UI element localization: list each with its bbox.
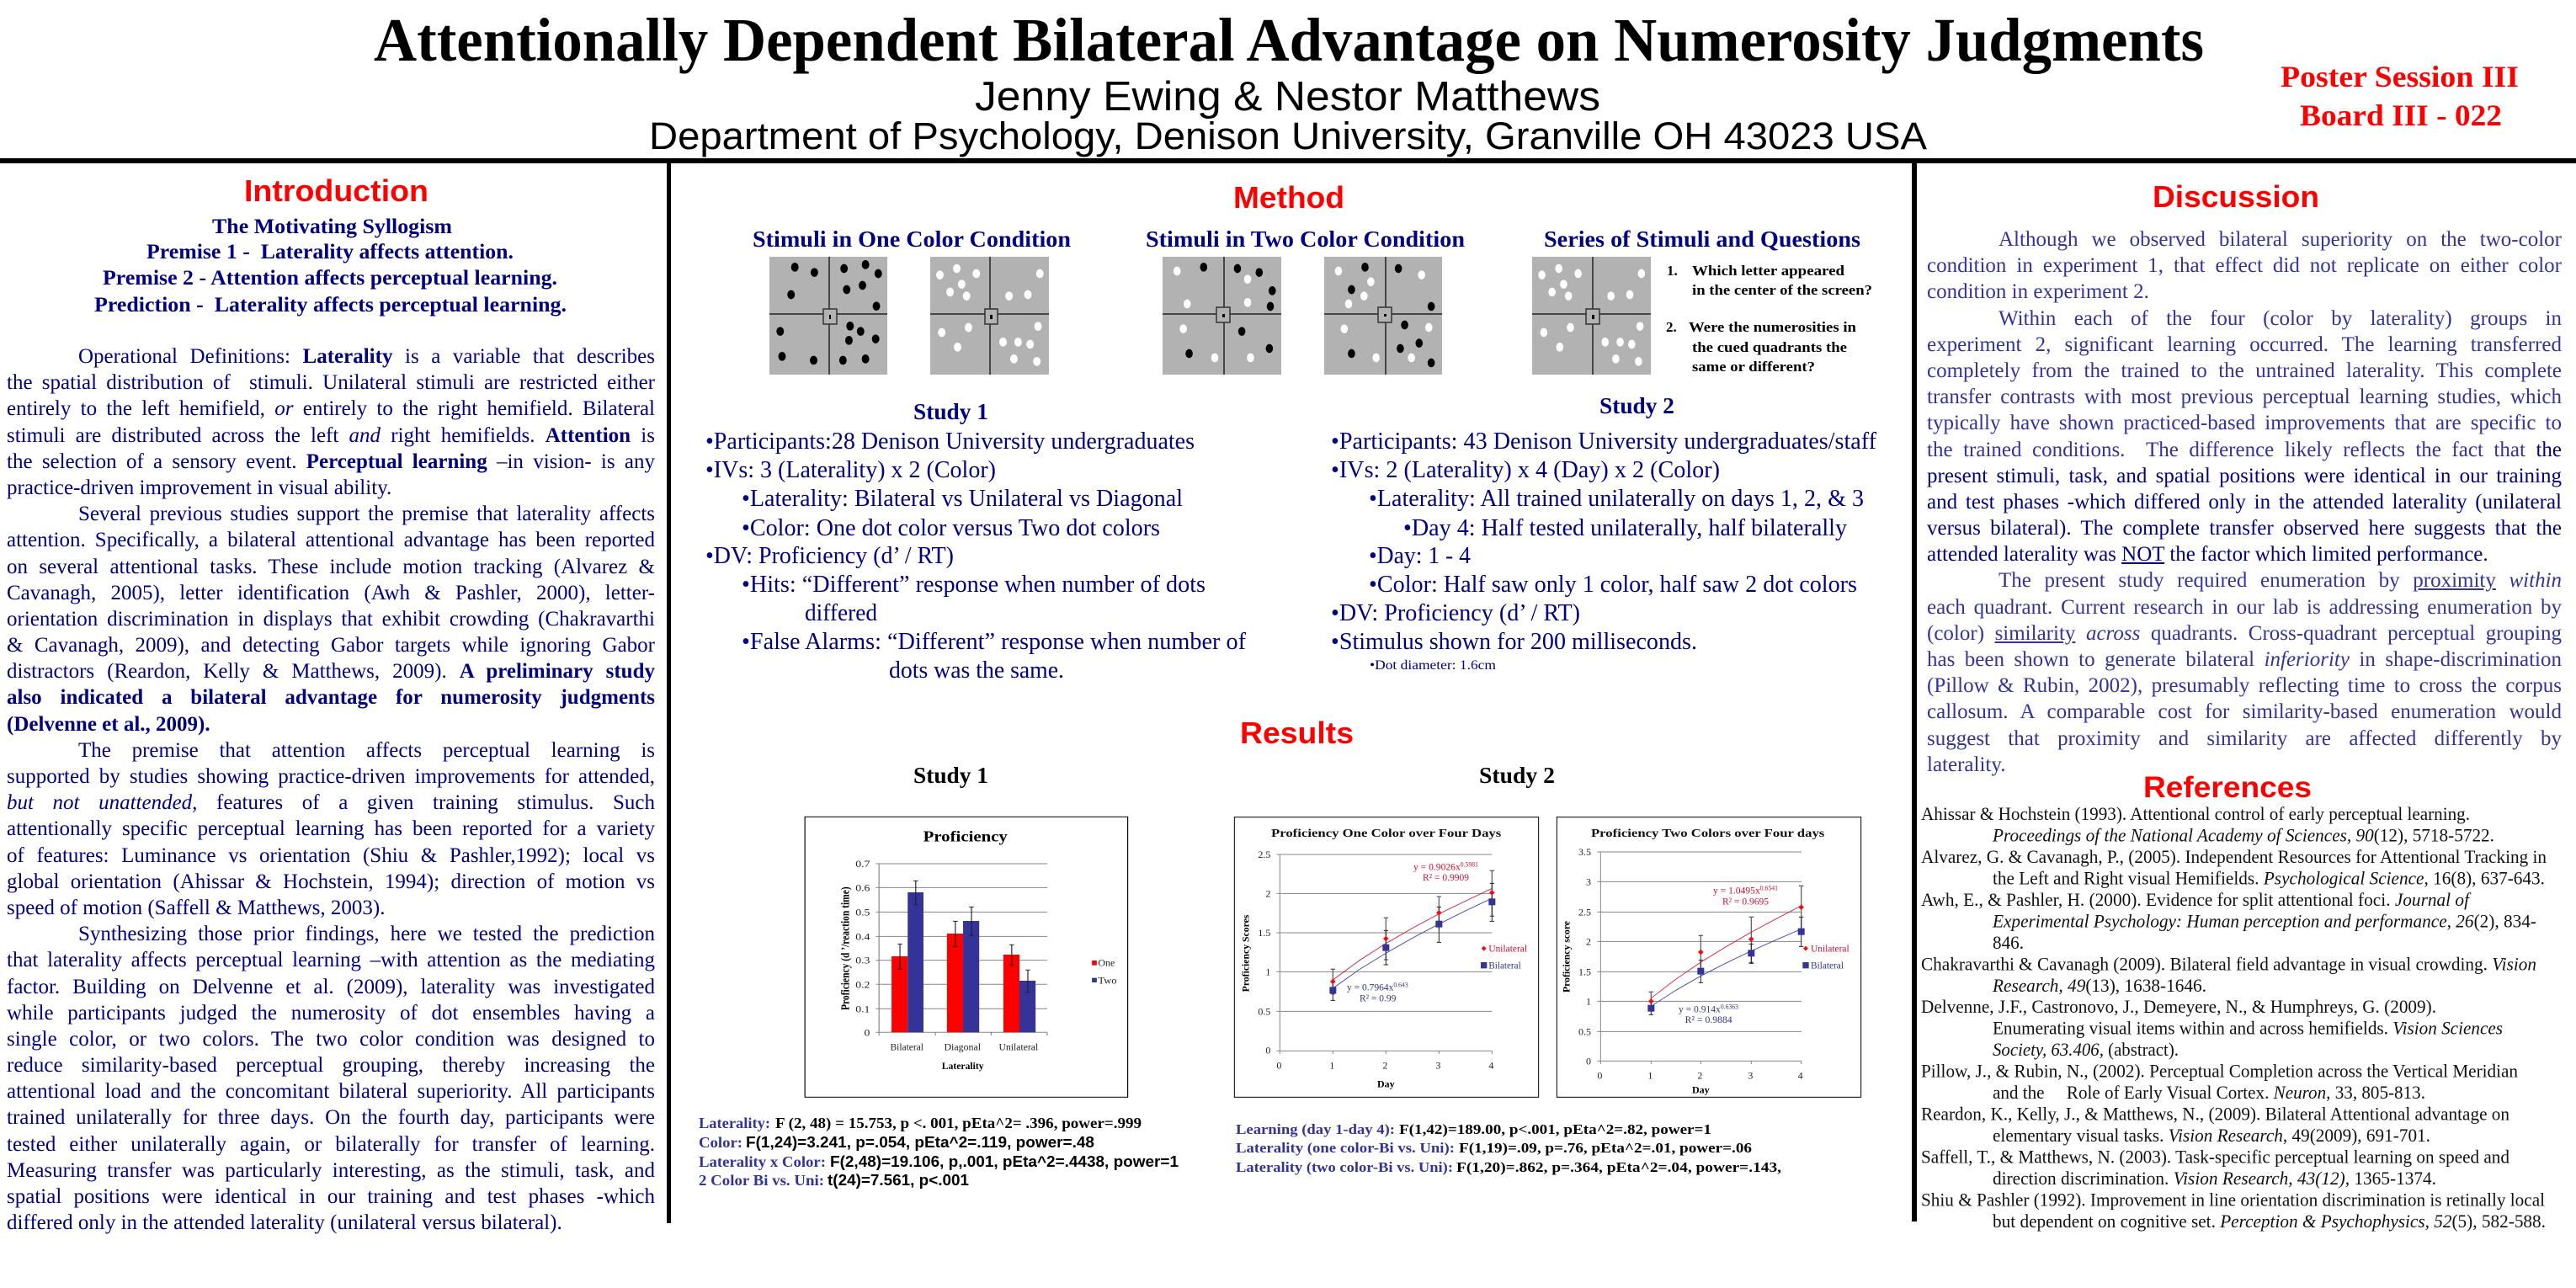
study 2 statistics: F(1,19)=.09, p=.76, pEta^2=.01, power=.06 xyxy=(1459,1140,1752,1156)
results study labels: Study 2 xyxy=(1479,763,1555,788)
paragraph: operational definitions: the selection of a sensory event. Perceptual learning –in vision- is any xyxy=(7,450,655,473)
paragraph: operational definitions: Operational Definitions: Laterality is a variable that describes xyxy=(78,345,655,368)
paragraph: attention and learning: speed of motion (Saffell & Matthews, 2003). xyxy=(7,897,385,919)
study 1 method list: •Hits: “Different” response when number of dots xyxy=(742,572,1206,598)
study 2 statistics: Learning (day 1-day 4): xyxy=(1236,1121,1395,1137)
study 1 statistics: Laterality: xyxy=(699,1115,770,1131)
bar chart: proficiency by laterality and color: 0.7 xyxy=(855,858,870,870)
paragraph: proximity and similarity: The present study required enumeration by proximity within xyxy=(1999,569,2562,592)
line chart: proficiency two colors over four days: 1 xyxy=(1586,995,1591,1007)
panel: method xyxy=(705,180,1877,684)
paragraph: operational definitions: the spatial distribution of stimuli. Unilateral stimuli are restricted either xyxy=(7,371,655,394)
line chart: proficiency one color over four days xyxy=(1234,817,1539,1097)
line chart: proficiency two colors over four days: 4 xyxy=(1798,1070,1803,1082)
study 1 method list: dots was the same. xyxy=(889,657,1064,684)
line chart: proficiency one color over four days: 1 xyxy=(1329,1059,1334,1071)
introduction body text xyxy=(7,345,655,1234)
study 1 method list: •False Alarms: “Different” response when number of xyxy=(742,629,1247,655)
line chart: proficiency one color over four days: 2 xyxy=(1382,1059,1387,1071)
study 2 statistics: Laterality (two color-Bi vs. Uni): xyxy=(1236,1159,1453,1175)
reference list: Ahissar & Hochstein (1993). Attentional control of early perceptual learning. xyxy=(1921,803,2470,824)
line chart: proficiency two colors over four days: 3.5 xyxy=(1578,846,1591,858)
reference list: Society, 63.406, (abstract). xyxy=(1993,1039,2179,1060)
subheadings: stimuli conditions: Stimuli in Two Color Condition xyxy=(1146,226,1465,252)
bar chart: proficiency by laterality and color: 0 xyxy=(865,1026,870,1038)
paragraph: experiment replication: condition in experiment 1, that effect did not replicate on either color xyxy=(1927,254,2562,277)
questions list: Which letter appeared xyxy=(1692,263,1845,279)
paragraph: experiment replication: condition in experiment 2. xyxy=(1927,280,2149,303)
results study labels xyxy=(913,763,1555,788)
study 1 method list: •IVs: 3 (Laterality) x 2 (Color) xyxy=(705,457,996,483)
bar chart: proficiency by laterality and color: 0.4 xyxy=(855,930,870,942)
panel: introduction xyxy=(7,173,655,1234)
bar chart: proficiency by laterality and color: 0.2 xyxy=(855,978,870,990)
paragraph: attention and learning: global orientation (Ahissar & Hochstein, 1994); direction of motion vs xyxy=(7,870,655,893)
motivating syllogism: Premise 2 - Attention affects perceptual learning. xyxy=(103,267,557,290)
paragraph: previous studies: Several previous studies support the premise that laterality affects xyxy=(78,503,655,525)
line chart: proficiency one color over four days: 0.5 xyxy=(1258,1005,1270,1017)
paragraph: previous studies: (Delvenne et al., 2009). xyxy=(7,713,210,736)
line chart: proficiency one color over four days: 0 xyxy=(1265,1045,1270,1056)
study 1 method list: •Color: One dot color versus Two dot colors xyxy=(742,515,1160,541)
reference list: and the Role of Early Visual Cortex. Neuron, 33, 805-813. xyxy=(1993,1082,2425,1103)
authors: Jenny Ewing & Nestor Matthews xyxy=(975,74,1600,120)
study 2 method heading: Study 2 xyxy=(1599,393,1674,418)
bar chart: proficiency by laterality and color xyxy=(805,817,1128,1097)
paragraph: synthesis and prediction: that laterality affects perceptual learning –with attention as the mediating xyxy=(7,949,655,971)
study 2 method list: •Day 4: Half tested unilaterally, half bilaterally xyxy=(1403,515,1847,541)
paragraph: synthesis and prediction: trained unilaterally for three days. On the fourth day, participants were xyxy=(7,1106,655,1129)
line chart: proficiency two colors over four days: 0 xyxy=(1597,1070,1602,1082)
line chart: proficiency one color over four days: Unilateral xyxy=(1488,942,1528,954)
reference list: Experimental Psychology: Human perception and performance, 26(2), 834- xyxy=(1992,910,2536,931)
stimulus: one color black dots xyxy=(769,257,887,375)
reference list: but dependent on cognitive set. Perception & Psychophysics, 52(5), 582-588. xyxy=(1993,1211,2546,1232)
paragraph: attention and learning: of features: Luminance vs orientation (Shiu & Pashler,1992); local vs xyxy=(7,844,655,867)
line chart: proficiency two colors over four days: Proficiency score xyxy=(1560,920,1572,993)
poster session label: Board III - 022 xyxy=(2300,98,2502,132)
paragraph: operational definitions: practice-driven improvement in visual ability. xyxy=(7,476,391,499)
line chart: proficiency one color over four days: 0.5981 xyxy=(1461,860,1478,868)
stimulus: two color display B xyxy=(1324,257,1442,375)
paragraph: synthesis and prediction: reduce similarity-based perceptual grouping, thereby increasing the xyxy=(7,1054,655,1077)
questions list: 1. xyxy=(1667,263,1678,279)
line chart: proficiency two colors over four days: 3 xyxy=(1586,876,1591,887)
paragraph: previous studies xyxy=(7,503,655,736)
bar chart: proficiency by laterality and color: Proficiency xyxy=(923,828,1008,845)
line chart: proficiency one color over four days: 3 xyxy=(1435,1059,1440,1071)
line chart: proficiency two colors over four days: 2 xyxy=(1697,1070,1702,1082)
panel: results xyxy=(699,716,1862,1189)
paragraph: previous studies: & Cavanagh, 2009), and detecting Gabor targets while ignoring Gabor xyxy=(7,634,655,657)
stimulus: series display xyxy=(1532,257,1651,375)
paragraph: previous studies: distractors (Reardon, Kelly & Matthews, 2009). A preliminary study xyxy=(7,660,655,683)
heading: discussion: Discussion xyxy=(2153,179,2319,214)
questions list: in the center of the screen? xyxy=(1692,282,1872,298)
line chart: proficiency two colors over four days: R² = 0.9695 xyxy=(1722,895,1769,907)
paragraph: learning transfer xyxy=(1927,307,2562,566)
paragraph: learning transfer: attended laterality was NOT the factor which limited performance. xyxy=(1927,543,2488,566)
study 2 method list xyxy=(1331,428,1877,673)
motivating syllogism: The Motivating Syllogism xyxy=(212,216,452,238)
paragraph: attention and learning: attentionally specific perceptual learning has been reported for a variety xyxy=(7,817,655,840)
reference list: elementary visual tasks. Vision Research, 49(2009), 691-701. xyxy=(1993,1125,2430,1146)
study 1 statistics: F (2, 48) = 15.753, p <. 001, pEta^2= .396, power=.999 xyxy=(775,1115,1142,1132)
paragraph: learning transfer: present stimuli, task, and spatial positions were identical in our training xyxy=(1927,465,2562,487)
paragraph: synthesis and prediction: while participants judged the numerosity of dot ensembles having a xyxy=(7,1002,655,1025)
questions list xyxy=(1666,263,1872,375)
study 1 statistics: Color: xyxy=(699,1134,742,1151)
line chart: proficiency two colors over four days: R² = 0.9884 xyxy=(1685,1014,1732,1025)
bar chart: proficiency by laterality and color: Bilateral xyxy=(891,1041,923,1052)
line chart: proficiency two colors over four days: Bilateral xyxy=(1811,959,1844,971)
bar chart: proficiency by laterality and color: Laterality xyxy=(942,1061,984,1072)
line chart: proficiency one color over four days: Proficiency One Color over Four Days xyxy=(1271,828,1502,840)
paragraph: previous studies: on several attentional tasks. These include motion tracking (Alvarez & xyxy=(7,556,655,577)
results study labels: Study 1 xyxy=(913,763,988,788)
paragraph: synthesis and prediction: tested either unilaterally again, or bilaterally for transfer of learning. xyxy=(7,1133,655,1156)
questions list: the cued quadrants the xyxy=(1692,339,1847,355)
study 2 method list: •Laterality: All trained unilaterally on days 1, 2, & 3 xyxy=(1369,486,1864,512)
reference list: Proceedings of the National Academy of Sciences, 90(12), 5718-5722. xyxy=(1992,825,2494,845)
study 2 method list: •Day: 1 - 4 xyxy=(1369,543,1471,569)
paragraph: synthesis and prediction: differed only in the attended laterality (unilateral versus bilateral). xyxy=(7,1211,562,1234)
reference list: Alvarez, G. & Cavanagh, P., (2005). Independent Resources for Attentional Tracking in xyxy=(1921,846,2547,867)
paragraph: synthesis and prediction: attentional load and the concomitant bilateral superiority. All participants xyxy=(7,1080,655,1103)
study 2 statistics: F(1,42)=189.00, p<.001, pEta^2=.82, power=1 xyxy=(1399,1121,1711,1137)
study 1 method list: •Laterality: Bilateral vs Unilateral vs Diagonal xyxy=(742,486,1183,512)
line chart: proficiency two colors over four days: 2 xyxy=(1586,935,1591,947)
bar chart: proficiency by laterality and color: Diagonal xyxy=(944,1041,982,1052)
line chart: proficiency two colors over four days: 0.5 xyxy=(1578,1025,1591,1037)
bar chart: proficiency by laterality and color: 0.3 xyxy=(855,955,870,966)
bar chart: proficiency by laterality and color: 0.6 xyxy=(855,881,870,893)
panel: discussion xyxy=(1927,179,2562,776)
study 1 statistics: F(2,48)=19.106, p,.001, pEta^2=.4438, power=1 xyxy=(830,1153,1179,1170)
line chart: proficiency one color over four days: 0 xyxy=(1276,1059,1281,1071)
paragraph: operational definitions: entirely to the left hemifield, or entirely to the right hemifield. Bilateral xyxy=(7,397,655,420)
line chart: proficiency two colors over four days: 0.6363 xyxy=(1721,1003,1738,1010)
discussion body text xyxy=(1927,228,2562,776)
bar chart: proficiency by laterality and color: One xyxy=(1098,957,1115,968)
line chart: proficiency two colors over four days: 0.6541 xyxy=(1760,885,1778,892)
bar chart: proficiency by laterality and color: 0.5 xyxy=(855,906,870,918)
bar chart: proficiency by laterality and color: Two xyxy=(1098,975,1117,986)
line chart: proficiency one color over four days: 2 xyxy=(1265,887,1270,899)
questions list: same or different? xyxy=(1692,359,1815,375)
paragraph: proximity and similarity: callosum. A comparable cost for similarity-based enumeration would xyxy=(1927,700,2562,723)
line chart: proficiency one color over four days: 1.5 xyxy=(1258,927,1270,939)
study 2 method list: •Stimulus shown for 200 milliseconds. xyxy=(1331,629,1697,655)
reference list xyxy=(1921,803,2547,1232)
heading: method: Method xyxy=(1233,180,1344,215)
line chart: proficiency one color over four days: 4 xyxy=(1488,1059,1493,1071)
paragraph: synthesis and prediction: Measuring transfer was particularly interesting, as the stimuli, task, and xyxy=(7,1159,655,1182)
reference list: Awh, E., & Pashler, H. (2000). Evidence for split attentional foci. Journal of xyxy=(1921,889,2472,910)
study 1 statistics: t(24)=7.561, p<.001 xyxy=(828,1172,969,1189)
study 2 method list: •Dot diameter: 1.6cm xyxy=(1370,658,1497,673)
paragraph: operational definitions xyxy=(7,345,655,499)
study 2 statistics: Laterality (one color-Bi vs. Uni): xyxy=(1236,1140,1455,1156)
subheadings: stimuli conditions: Stimuli in One Color Condition xyxy=(753,226,1071,252)
reference list: Pillow, J., & Rubin, N., (2002). Perceptual Completion across the Vertical Meridian xyxy=(1921,1061,2518,1082)
line chart: proficiency one color over four days: 1 xyxy=(1265,966,1270,977)
study 2 method list: •Color: Half saw only 1 color, half saw 2 dot colors xyxy=(1369,572,1857,598)
reference list: Research, 49(13), 1638-1646. xyxy=(1992,975,2206,996)
paragraph: proximity and similarity: has been shown to generate bilateral inferiority in shape-discrimination xyxy=(1927,648,2562,671)
line chart: proficiency one color over four days: y = 0.9026x xyxy=(1413,860,1462,872)
paragraph: attention and learning: The premise that attention affects perceptual learning is xyxy=(78,739,655,762)
bar chart: proficiency by laterality and color: 0.1 xyxy=(855,1003,870,1014)
motivating syllogism: Premise 1 - Laterality affects attention. xyxy=(146,241,514,263)
paragraph: synthesis and prediction: spatial positions were identical in our training and test phases -which xyxy=(7,1185,655,1208)
study 1 method heading: Study 1 xyxy=(913,399,988,424)
paragraph: learning transfer: and test phases -which differed only in the attended laterality (unilateral xyxy=(1927,491,2562,514)
reference list: Shiu & Pashler (1992). Improvement in line orientation discrimination is retinally local xyxy=(1921,1189,2545,1211)
line chart: proficiency two colors over four days: 0 xyxy=(1586,1055,1591,1067)
study 1 statistics xyxy=(699,1115,1179,1189)
motivating syllogism: Prediction - Laterality affects perceptual learning. xyxy=(94,294,567,317)
paragraph: learning transfer: the trained conditions. The difference likely reflects the fact that the xyxy=(1927,438,2562,461)
stimulus: two color display A xyxy=(1163,257,1281,375)
questions list: Were the numerosities in xyxy=(1689,319,1857,335)
subheadings: stimuli conditions xyxy=(753,226,1860,252)
paragraph: experiment replication: Although we observed bilateral superiority on the two-color xyxy=(1999,228,2562,251)
reference list: Delvenne, J.F., Castronovo, J., Demeyere, N., & Humphreys, G. (2009). xyxy=(1921,996,2436,1017)
paragraph: operational definitions: stimuli are distributed across the left and right hemifields. Attention is xyxy=(7,424,655,447)
paragraph: learning transfer: transfer contrasts with most previous perceptual learning studies, which xyxy=(1927,386,2562,408)
line chart: proficiency two colors over four days: 1.5 xyxy=(1578,966,1591,977)
subheadings: stimuli conditions: Series of Stimuli and Questions xyxy=(1544,226,1860,252)
affiliation: Department of Psychology, Denison University, Granville OH 43023 USA xyxy=(649,114,1927,157)
paragraph: proximity and similarity: laterality. xyxy=(1927,753,2005,776)
study 1 statistics: 2 Color Bi vs. Uni: xyxy=(699,1172,824,1189)
poster session label: Poster Session III xyxy=(2281,60,2519,93)
paragraph: learning transfer: experiment 2, significant learning occurred. The learning transferred xyxy=(1927,333,2562,356)
line chart: proficiency one color over four days: Day xyxy=(1377,1078,1395,1089)
study 1 method list xyxy=(705,428,1247,684)
bar chart: proficiency by laterality and color: Proficiency (d ’/reaction time) xyxy=(838,886,852,1010)
paragraph: attention and learning: but not unattended, features of a given training stimulus. Such xyxy=(7,791,655,814)
line chart: proficiency one color over four days: Bilateral xyxy=(1488,959,1521,971)
paragraph: attention and learning: supported by studies showing practice-driven improvements for attended, xyxy=(7,765,655,788)
study 2 statistics xyxy=(1236,1121,1781,1175)
line chart: proficiency two colors over four days: 3 xyxy=(1748,1070,1753,1082)
line chart: proficiency two colors over four days: y = 1.0495x xyxy=(1713,885,1762,897)
study 1 method list: •DV: Proficiency (d’ / RT) xyxy=(705,543,954,569)
study 1 method list: •Participants:28 Denison University undergraduates xyxy=(705,428,1195,455)
line chart: proficiency one color over four days: Proficiency Scores xyxy=(1239,914,1251,992)
line chart: proficiency two colors over four days: 1 xyxy=(1647,1070,1653,1082)
paragraph: proximity and similarity: each quadrant. Current research in our lab is addressing enumeration by xyxy=(1927,596,2562,619)
line chart: proficiency two colors over four days xyxy=(1557,817,1861,1097)
reference list: Chakravarthi & Cavanagh (2009). Bilateral field advantage in visual crowding. Vision xyxy=(1921,953,2536,974)
reference list: Enumerating visual items within and across hemifields. Vision Sciences xyxy=(1993,1018,2503,1039)
study 1 statistics: Laterality x Color: xyxy=(699,1153,826,1170)
paragraph: proximity and similarity: (Pillow & Rubin, 2002), presumably reflecting time to cross the corpus xyxy=(1927,674,2562,697)
heading: results: Results xyxy=(1240,716,1354,750)
study 1 statistics: F(1,24)=3.241, p=.054, pEta^2=.119, power=.48 xyxy=(746,1134,1094,1151)
panel: references xyxy=(1921,771,2547,1232)
line chart: proficiency one color over four days: y = 0.7964x xyxy=(1347,982,1396,993)
study 2 method list: •IVs: 2 (Laterality) x 4 (Day) x 2 (Color) xyxy=(1331,457,1720,483)
paragraph: learning transfer: completely from the trained to the untrained laterality. This complete xyxy=(1927,359,2562,382)
line chart: proficiency one color over four days: 0.643 xyxy=(1393,982,1408,989)
reference list: direction discrimination. Vision Research, 43(12), 1365-1374. xyxy=(1993,1168,2436,1189)
paragraph: previous studies: also indicated a bilateral advantage for numerosity judgments xyxy=(7,686,655,709)
line chart: proficiency two colors over four days: Proficiency Two Colors over Four days xyxy=(1591,828,1825,840)
paragraph: learning transfer: versus bilateral). The complete transfer observed here suggests that the xyxy=(1927,517,2562,540)
line chart: proficiency one color over four days: R² = 0.99 xyxy=(1360,992,1396,1003)
line chart: proficiency one color over four days: 2.5 xyxy=(1258,849,1270,860)
paragraph: previous studies: orientation discrimination in displays that exhibit crowding (Chakravarthi xyxy=(7,608,655,631)
paragraph: previous studies: Cavanagh, 2005), letter identification (Awh & Pashler, 2000), letter- xyxy=(7,582,655,604)
bar chart: proficiency by laterality and color: Unilateral xyxy=(999,1041,1039,1052)
questions list: 2. xyxy=(1666,319,1677,335)
paragraph: experiment replication xyxy=(1927,228,2562,303)
paragraph: previous studies: attention. Specifically, a bilateral attentional advantage has been reported xyxy=(7,529,655,551)
paragraph: proximity and similarity: suggest that proximity and similarity are affected differently by xyxy=(1927,727,2562,750)
study 2 statistics: F(1,20)=.862, p=.364, pEta^2=.04, power=.143, xyxy=(1456,1159,1781,1175)
reference list: the Left and Right visual Hemifields. Psychological Science, 16(8), 637-643. xyxy=(1993,867,2545,888)
paragraph: learning transfer: Within each of the four (color by laterality) groups in xyxy=(1999,307,2562,330)
line chart: proficiency two colors over four days: 2.5 xyxy=(1578,906,1591,918)
paragraph: attention and learning xyxy=(7,739,655,919)
paragraph: proximity and similarity: (color) similarity across quadrants. Cross-quadrant perceptual grouping xyxy=(1927,622,2562,645)
motivating syllogism xyxy=(94,216,567,317)
paragraph: synthesis and prediction xyxy=(7,923,655,1234)
heading: introduction: Introduction xyxy=(244,173,428,208)
line chart: proficiency two colors over four days: Day xyxy=(1692,1084,1710,1096)
line chart: proficiency two colors over four days: y = 0.914x xyxy=(1679,1003,1722,1014)
heading: references: References xyxy=(2143,771,2312,804)
paragraph: proximity and similarity xyxy=(1927,569,2562,776)
paragraph: synthesis and prediction: Synthesizing those prior findings, here we tested the prediction xyxy=(78,923,655,945)
stimulus: one color white dots xyxy=(930,257,1049,375)
paragraph: synthesis and prediction: single color, or two colors. The two color condition was designed to xyxy=(7,1028,655,1051)
study 1 method list: differed xyxy=(805,600,877,626)
reference list: 846. xyxy=(1993,932,2024,953)
paragraph: learning transfer: typically have shown practiced-based improvements that are specific to xyxy=(1927,412,2562,434)
line chart: proficiency two colors over four days: Unilateral xyxy=(1811,942,1850,954)
reference list: Reardon, K., Kelly, J., & Matthews, N., (2009). Bilateral Attentional advantage on xyxy=(1921,1104,2509,1125)
header banner xyxy=(374,6,2519,157)
title: Attentionally Dependent Bilateral Advantage on Numerosity Judgments xyxy=(374,6,2204,74)
poster session label xyxy=(2281,60,2519,132)
reference list: Saffell, T., & Matthews, N. (2003). Task-specific perceptual learning on speed and xyxy=(1921,1147,2509,1167)
line chart: proficiency one color over four days: R² = 0.9909 xyxy=(1423,871,1469,883)
study 2 method list: •DV: Proficiency (d’ / RT) xyxy=(1331,600,1580,626)
paragraph: synthesis and prediction: factor. Building on Delvenne et al. (2009), laterality was investigated xyxy=(7,975,655,998)
study 2 method list: •Participants: 43 Denison University undergraduates/staff xyxy=(1331,428,1877,455)
